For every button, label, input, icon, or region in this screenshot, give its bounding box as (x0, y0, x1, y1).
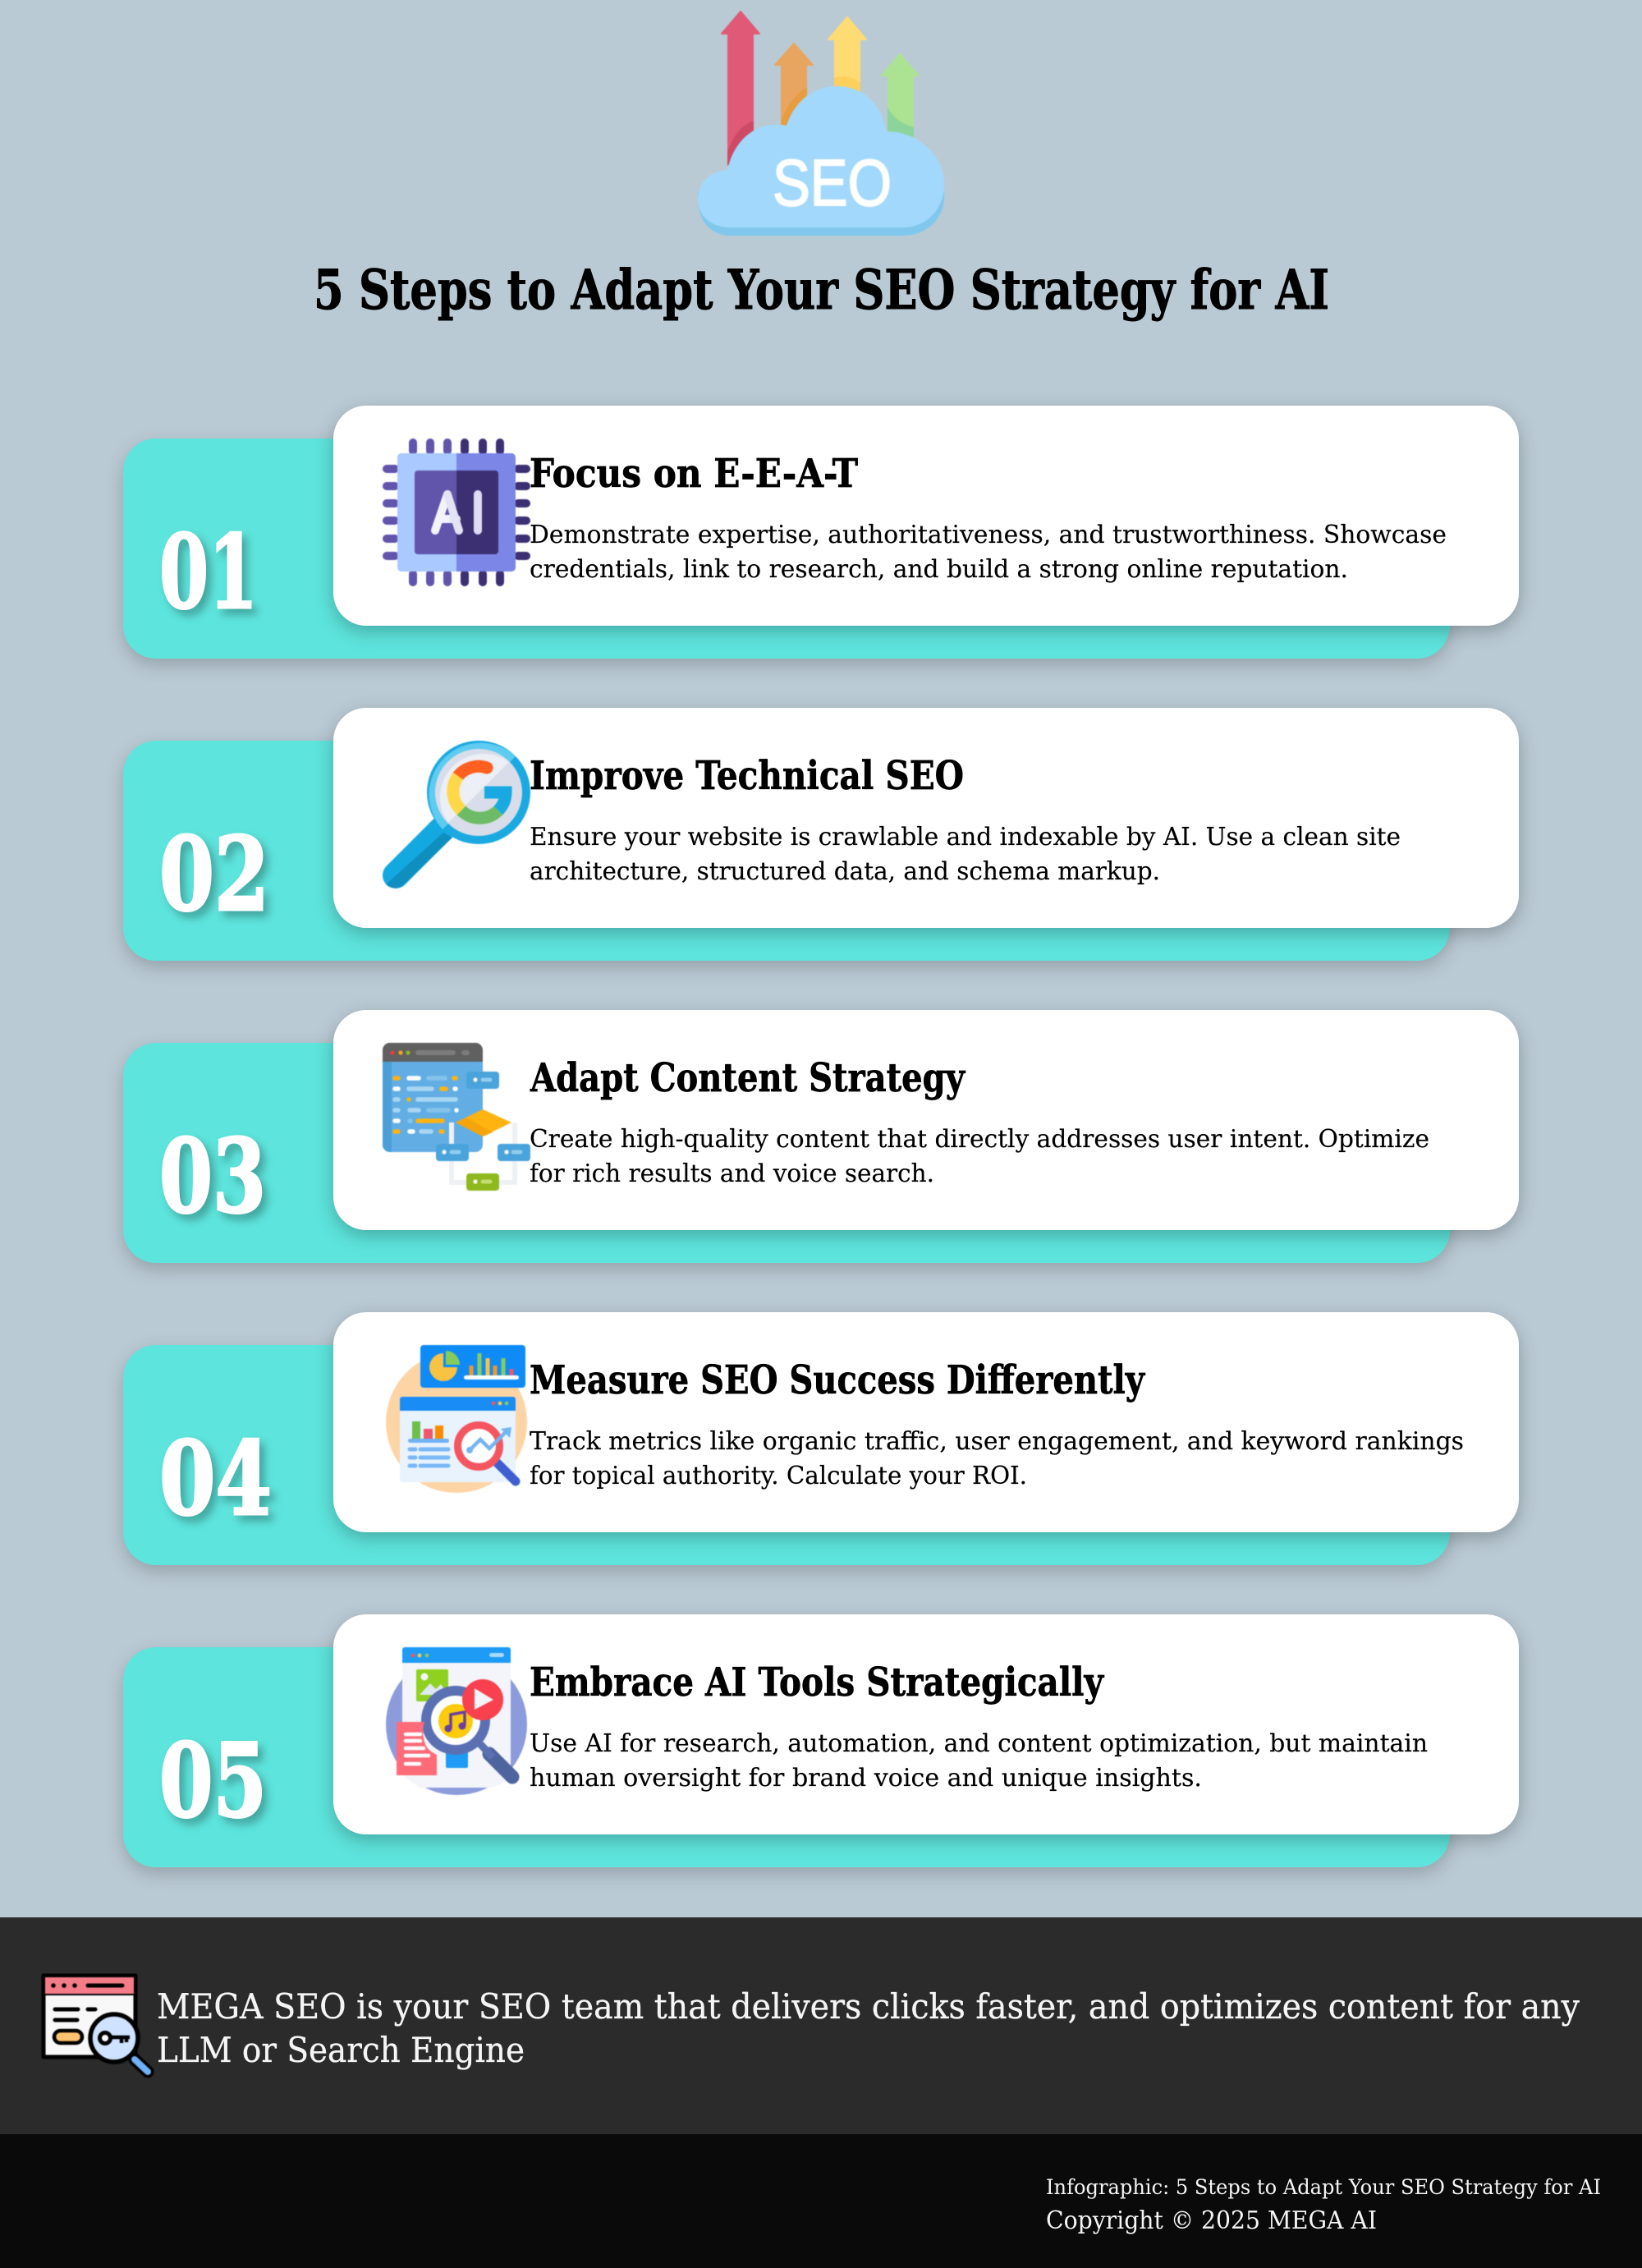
icon: window with key magnifier (44, 1976, 148, 2072)
body 3: for rich results and voice search. (530, 1159, 934, 1187)
icon: AI chip (383, 438, 530, 586)
icon: code window flowchart (383, 1043, 530, 1191)
heading 2: Improve Technical SEO (530, 753, 964, 799)
step number 02: 02 (159, 815, 269, 934)
number tab 04 (123, 1345, 1450, 1565)
icon: SEO cloud with arrows: SEO (773, 146, 892, 219)
body 4: Track metrics like organic traffic, user engagement, and keyword rankings (530, 1427, 1464, 1455)
credit line: Infographic: 5 Steps to Adapt Your SEO Strategy for AI (1046, 2175, 1601, 2199)
panel: promo banner (0, 1917, 1642, 2134)
icon: media search (386, 1647, 527, 1795)
white card 4 (333, 1312, 1519, 1532)
body 2: Ensure your website is crawlable and indexable by AI. Use a clean site (530, 823, 1401, 851)
step number 04: 04 (159, 1420, 272, 1539)
panel: step 4 (123, 1312, 1519, 1565)
step number 05: 05 (159, 1722, 267, 1841)
panel: step 1 (123, 406, 1519, 659)
body 1 (530, 521, 1447, 583)
step number 03: 03 (159, 1118, 266, 1237)
body 4: for topical authority. Calculate your ROI. (530, 1462, 1027, 1490)
panel: step 5 (123, 1614, 1519, 1867)
number tab 02 (123, 741, 1450, 961)
panel: step 2 (123, 708, 1519, 961)
body 4 (530, 1427, 1464, 1490)
banner text: MEGA SEO is your SEO team that delivers clicks faster, and optimizes content for any (157, 1986, 1580, 2027)
body 1: credentials, link to research, and build a strong online reputation. (530, 555, 1348, 583)
heading 1: Focus on E-E-A-T (530, 451, 858, 497)
icon: SEO cloud with arrows (698, 11, 944, 236)
white card 3 (333, 1010, 1519, 1230)
icon: Google magnifier (386, 741, 530, 888)
number tab 01 (123, 438, 1450, 659)
body 2 (530, 823, 1401, 885)
body 3: Create high-quality content that directly addresses user intent. Optimize (530, 1125, 1429, 1153)
icon: analytics dashboard (386, 1345, 527, 1493)
heading 5: Embrace AI Tools Strategically (530, 1660, 1105, 1706)
white card 2 (333, 708, 1519, 928)
body 5 (530, 1729, 1428, 1792)
white card 5 (333, 1614, 1519, 1834)
number tab 03 (123, 1043, 1450, 1263)
body 1: Demonstrate expertise, authoritativeness, and trustworthiness. Showcase (530, 521, 1447, 549)
number tab 05 (123, 1647, 1450, 1867)
panel: footer (0, 2134, 1642, 2268)
body 3 (530, 1125, 1429, 1187)
title: 5 Steps to Adapt Your SEO Strategy for AI (314, 258, 1329, 322)
body 5: human oversight for brand voice and unique insights. (530, 1764, 1202, 1792)
banner text: LLM or Search Engine (157, 2030, 525, 2070)
body 2: architecture, structured data, and schema markup. (530, 857, 1160, 885)
heading 4: Measure SEO Success Differently (530, 1357, 1146, 1403)
step number 01: 01 (159, 513, 258, 632)
panel: step 3 (123, 1010, 1519, 1263)
heading 3: Adapt Content Strategy (530, 1055, 966, 1101)
body 5: Use AI for research, automation, and content optimization, but maintain (530, 1729, 1428, 1757)
copyright line: Copyright © 2025 MEGA AI (1046, 2206, 1377, 2235)
white card 1 (333, 406, 1519, 626)
banner text (157, 1986, 1580, 2070)
